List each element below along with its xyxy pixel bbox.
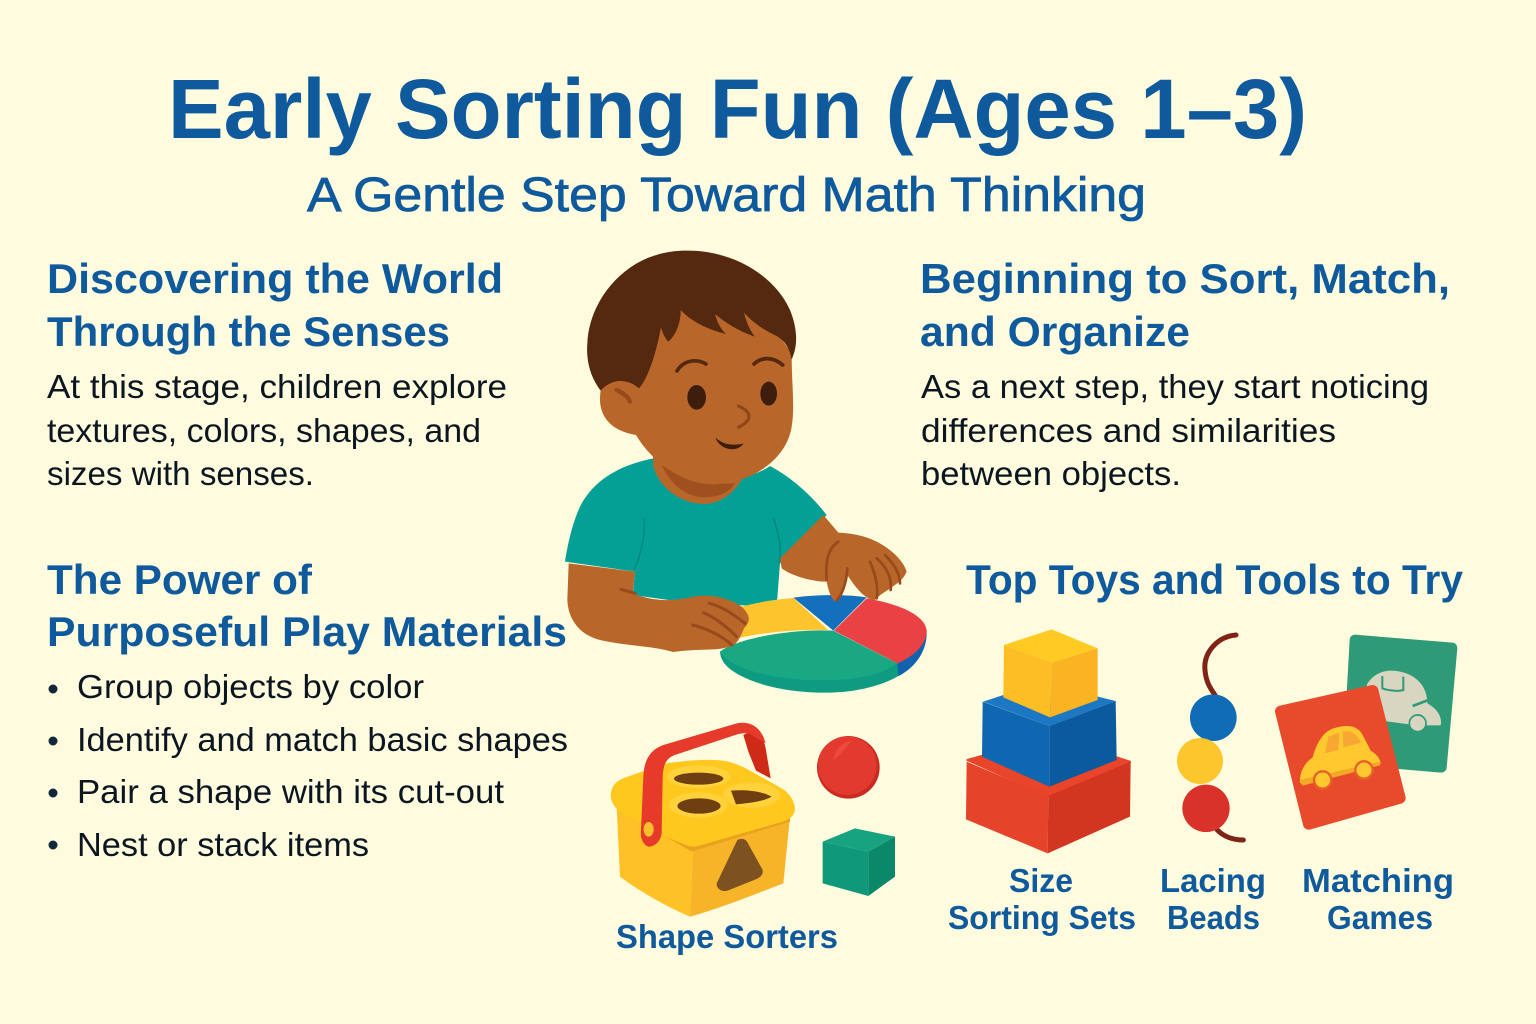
label: size sorting sets <box>948 862 1136 936</box>
neck shadow <box>662 465 735 497</box>
heading: discovering the world: Through the Senses <box>47 308 450 355</box>
bullet list: Identify and match basic shapes <box>77 721 568 758</box>
beads <box>1177 694 1237 832</box>
mouth <box>715 438 744 449</box>
head <box>600 290 793 484</box>
panel: beginning to sort <box>920 255 1450 492</box>
heading: discovering the world: Discovering the World <box>47 255 503 302</box>
text block: sorting description: As a next step, they start noticing <box>921 368 1429 405</box>
label: matching games: Matching <box>1302 862 1454 899</box>
shirt <box>565 458 827 607</box>
panel: discovering the world <box>47 255 507 492</box>
label: size sorting sets: Sorting Sets <box>948 899 1136 936</box>
sorter lid <box>611 760 795 846</box>
bullet list <box>48 668 568 863</box>
lace <box>1205 635 1243 840</box>
shirt folds <box>634 518 780 570</box>
heading: power of purposeful play: Purposeful Play Materials <box>47 608 567 655</box>
heading: power of purposeful play <box>47 556 567 655</box>
label: shape sorters: Shape Sorters <box>616 918 838 955</box>
illustration: matching cards <box>1281 640 1452 824</box>
text block: senses description <box>47 368 507 492</box>
bullet list: Pair a shape with its cut-out <box>77 773 504 810</box>
pale car <box>1367 671 1441 732</box>
hair <box>587 251 796 391</box>
label: lacing beads: Beads <box>1167 899 1260 936</box>
panel: purposeful play materials <box>47 556 568 863</box>
triangle cut-out <box>717 839 763 891</box>
label: lacing beads: Lacing <box>1160 862 1266 899</box>
eyebrows <box>677 359 783 371</box>
red card <box>1281 691 1400 824</box>
neck <box>653 440 747 504</box>
ear detail <box>617 390 630 402</box>
label: lacing beads <box>1160 862 1266 936</box>
red base block <box>966 756 1131 853</box>
handle hinge <box>644 822 654 837</box>
text block: sorting description: differences and similarities <box>921 412 1336 449</box>
title: Early Sorting Fun (Ages 1–3) <box>168 62 1307 156</box>
heading: beginning to sort <box>920 255 1450 355</box>
illustration: lacing beads <box>1177 635 1243 840</box>
illustration: shape sorter toy <box>611 723 895 917</box>
heading: discovering the world <box>47 255 503 355</box>
sorter body <box>617 807 790 917</box>
bullet list: Nest or stack items <box>77 826 369 863</box>
text block: senses description: textures, colors, shapes, and <box>47 412 481 449</box>
left arm and hand <box>567 563 749 652</box>
illustration: child playing with sorting disc <box>565 251 927 693</box>
illustration: size sorting stack <box>966 629 1131 853</box>
right arm and hand <box>780 515 907 602</box>
green card <box>1348 640 1452 767</box>
sorter handle <box>641 723 771 847</box>
text block: sorting description: between objects. <box>921 455 1181 492</box>
heading: top toys and tools: Top Toys and Tools to Try <box>966 556 1464 603</box>
heading: beginning to sort: Beginning to Sort, Match, <box>920 255 1450 302</box>
heading: beginning to sort: and Organize <box>920 308 1190 355</box>
text block: senses description: sizes with senses. <box>47 455 314 492</box>
label: matching games <box>1302 862 1454 936</box>
sorting disc <box>720 595 927 693</box>
label: size sorting sets: Size <box>1009 862 1073 899</box>
lid raised areas <box>667 765 780 818</box>
subtitle: A Gentle Step Toward Math Thinking <box>307 169 1146 222</box>
heading: power of purposeful play: The Power of <box>47 556 313 603</box>
nose <box>738 406 749 427</box>
bullet list: Group objects by color <box>77 668 424 705</box>
sorter holes <box>674 773 772 814</box>
text block: senses description: At this stage, children explore <box>47 368 507 405</box>
green cube <box>823 828 895 896</box>
red ball <box>817 736 880 799</box>
label: matching games: Games <box>1327 899 1433 936</box>
text block: sorting description <box>921 368 1429 492</box>
blue middle block <box>982 695 1117 787</box>
yellow top block <box>1003 629 1098 717</box>
yellow car <box>1300 726 1381 789</box>
eyes <box>687 382 777 410</box>
